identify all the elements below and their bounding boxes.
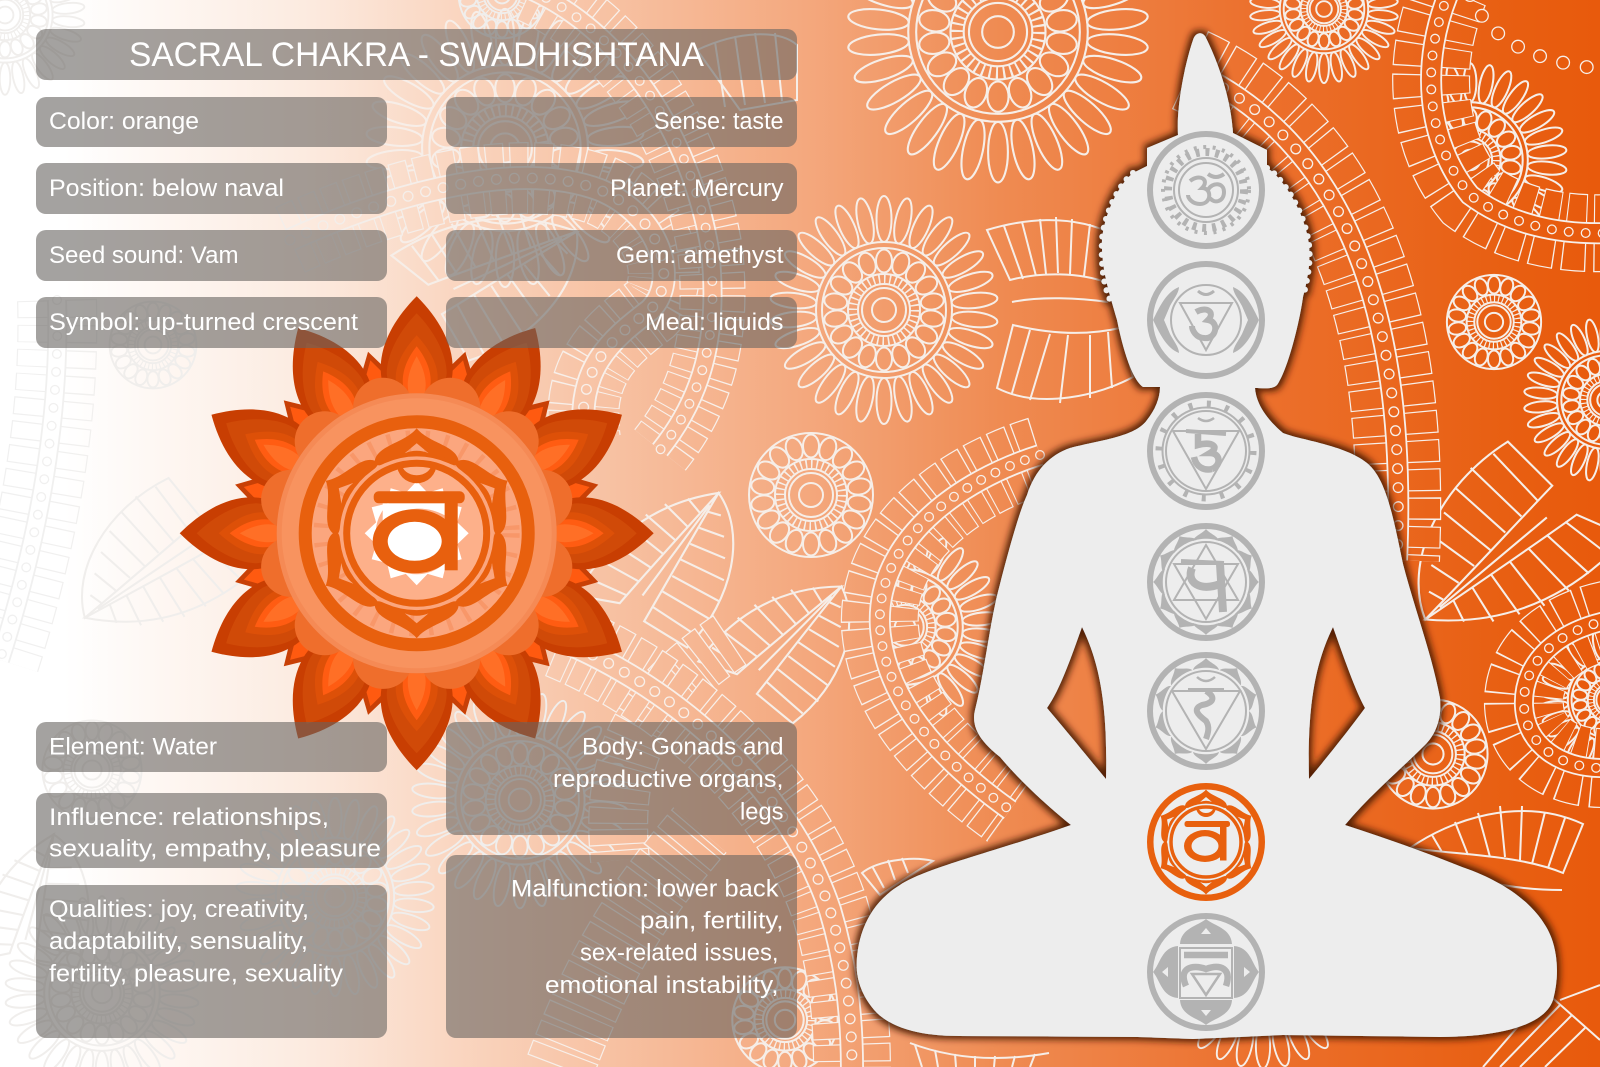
info box: meal <box>446 297 797 348</box>
heart chakra icon <box>1150 526 1262 638</box>
info box: color: Color: orange <box>49 108 199 135</box>
info box: qualities: adaptability, sensuality, <box>49 928 308 955</box>
info box: influence <box>36 793 387 868</box>
info box: malfunction <box>446 855 797 1038</box>
info box: qualities: fertility, pleasure, sexuality <box>49 960 344 988</box>
info box: meal: Meal: liquids <box>645 309 784 336</box>
info box: body: reproductive organs, <box>553 766 784 793</box>
info box: malfunction: emotional instability, <box>545 972 778 999</box>
root chakra icon <box>1150 916 1262 1028</box>
info box: qualities <box>36 885 387 1038</box>
info box: malfunction: pain, fertility, <box>640 908 784 934</box>
info box: body <box>446 722 797 835</box>
info box: influence: Influence: relationships, <box>49 804 329 831</box>
title bar: SACRAL CHAKRA - SWADHISHTANA <box>129 36 704 74</box>
meditating figure silhouette <box>857 33 1557 1039</box>
solar plexus chakra icon <box>1150 655 1262 767</box>
lotus chakra emblem <box>180 296 654 770</box>
crown chakra icon <box>1150 134 1262 246</box>
info box: symbol <box>36 297 387 348</box>
info box: element: Element: Water <box>49 734 217 760</box>
info box: body: legs <box>740 798 784 826</box>
info box: seed sound <box>36 230 387 281</box>
info box: body: Body: Gonads and <box>582 734 784 760</box>
info box: element <box>36 722 387 772</box>
info box: symbol: Symbol: up-turned crescent <box>49 309 358 336</box>
sacral chakra icon (highlighted) <box>1150 786 1262 898</box>
info box: planet: Planet: Mercury <box>610 175 784 202</box>
info box: position <box>36 163 387 214</box>
third eye chakra icon <box>1150 264 1262 376</box>
info box: malfunction: sex-related issues, <box>580 940 778 966</box>
title bar <box>36 29 797 80</box>
info box: color <box>36 97 387 147</box>
info box: seed sound: Seed sound: Vam <box>49 242 238 269</box>
info box: qualities: Qualities: joy, creativity, <box>49 896 309 923</box>
throat chakra icon <box>1150 395 1262 507</box>
info box: malfunction: Malfunction: lower back <box>511 876 779 902</box>
info box: gem <box>446 230 797 281</box>
info box: planet <box>446 163 797 214</box>
info box: influence: sexuality, empathy, pleasure <box>49 836 381 862</box>
info box: gem: Gem: amethyst <box>616 242 784 269</box>
info box: sense <box>446 97 797 147</box>
info box: sense: Sense: taste <box>654 108 784 135</box>
info box: position: Position: below naval <box>49 175 284 202</box>
